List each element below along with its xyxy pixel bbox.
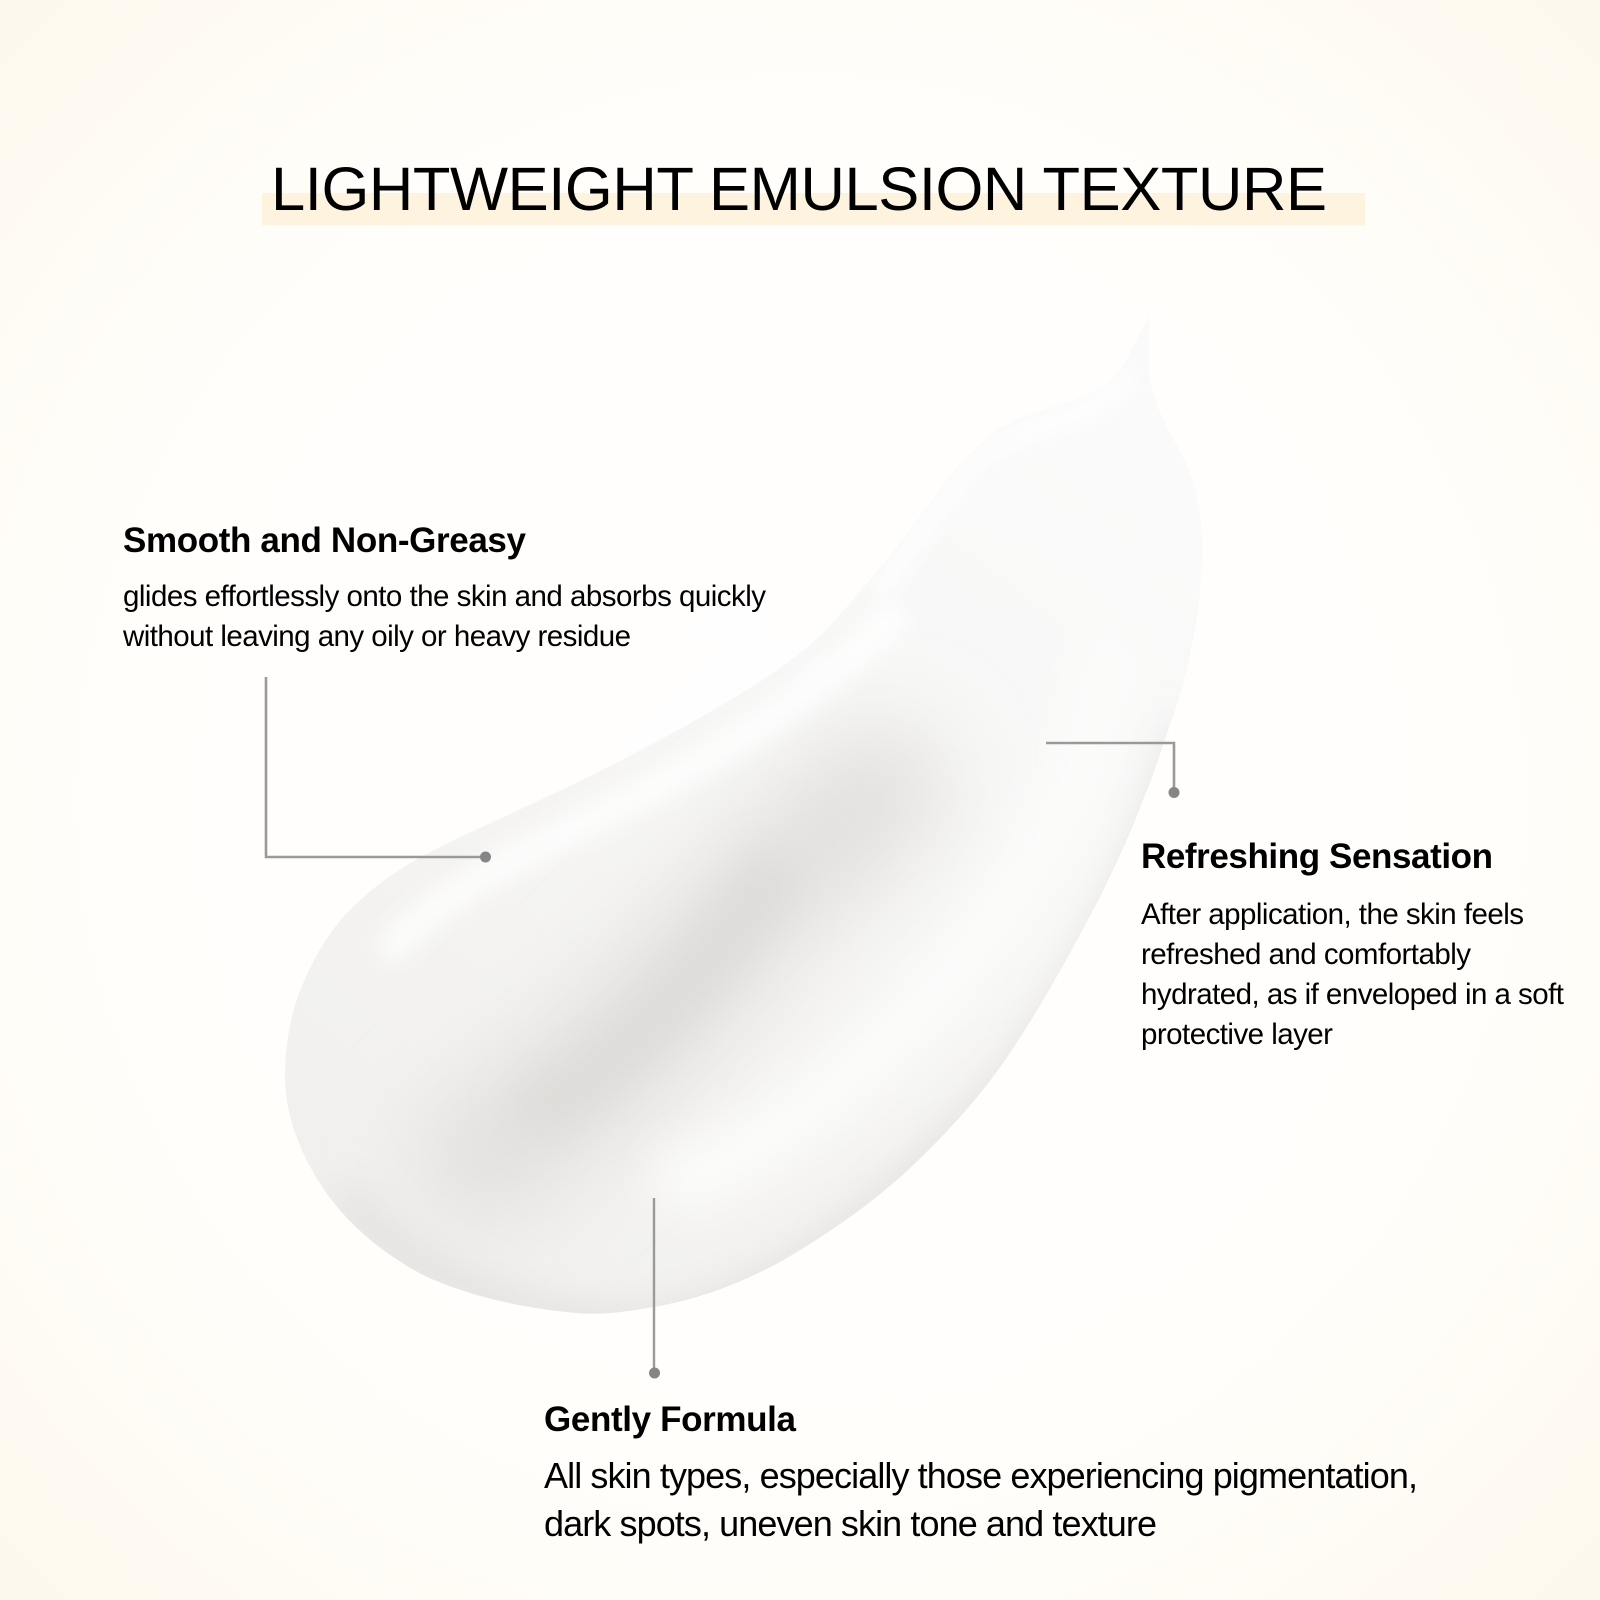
- leader line: [266, 677, 491, 862]
- description: refreshed and comfortably: [1141, 938, 1471, 971]
- description: dark spots, uneven skin tone and texture: [544, 1503, 1157, 1544]
- description: hydrated, as if enveloped in a soft: [1141, 978, 1564, 1011]
- title: [262, 155, 1365, 225]
- callout: refreshing sensation: [1046, 743, 1564, 1051]
- title text: LIGHTWEIGHT EMULSION TEXTURE: [271, 155, 1327, 224]
- heading: Smooth and Non-Greasy: [123, 521, 527, 560]
- description: without leaving any oily or heavy residue: [122, 620, 631, 653]
- description: protective layer: [1141, 1018, 1333, 1051]
- description: [122, 580, 766, 653]
- heading: Gently Formula: [544, 1400, 797, 1439]
- callout: gently formula: [544, 1198, 1418, 1544]
- description: [1141, 898, 1564, 1051]
- heading: Refreshing Sensation: [1141, 837, 1493, 876]
- leader line: [1046, 743, 1180, 798]
- description: After application, the skin feels: [1141, 898, 1524, 931]
- description: [544, 1455, 1418, 1544]
- title highlight band: [262, 193, 1365, 225]
- leader line: [649, 1198, 660, 1378]
- cream swatch: [285, 634, 1176, 1314]
- description: All skin types, especially those experiencing pigmentation,: [544, 1455, 1418, 1496]
- description: glides effortlessly onto the skin and absorbs quickly: [123, 580, 766, 613]
- callout: smooth and non-greasy: [122, 521, 766, 862]
